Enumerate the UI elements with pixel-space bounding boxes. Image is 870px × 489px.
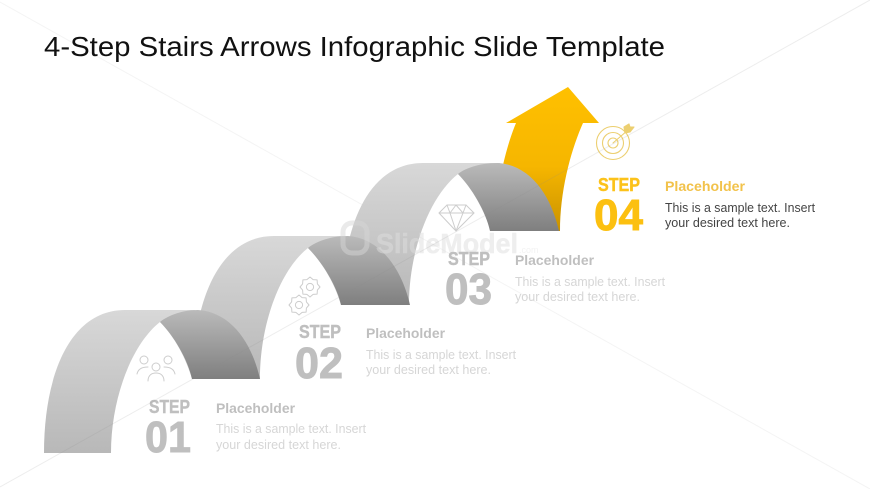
stair arch 1 bbox=[44, 310, 260, 453]
watermark: SlideModel bbox=[376, 228, 518, 259]
step 1 text: STEP bbox=[149, 396, 190, 417]
step 2 text: STEP bbox=[299, 321, 341, 342]
step 2 text bbox=[295, 321, 517, 388]
watermark: .com bbox=[519, 245, 539, 255]
step 4 text: This is a sample text. Insert bbox=[665, 201, 816, 215]
title: 4-Step Stairs Arrows Infographic Slide Template bbox=[44, 31, 665, 62]
step 4 text: 04 bbox=[594, 191, 644, 240]
icon: diamond bbox=[439, 205, 474, 231]
step 3 text: STEP bbox=[448, 248, 490, 269]
step 3 text: This is a sample text. Insert bbox=[515, 275, 666, 289]
step 2 text: your desired text here. bbox=[366, 363, 491, 377]
step 3 text: 03 bbox=[445, 265, 492, 314]
step 2 text: 02 bbox=[295, 339, 343, 388]
step 1 text: your desired text here. bbox=[216, 438, 341, 452]
step 3 text: Placeholder bbox=[515, 252, 595, 268]
icon: gears bbox=[289, 277, 320, 315]
step 3 text bbox=[445, 248, 666, 314]
stair arch 2 bbox=[193, 236, 410, 379]
watermark bbox=[343, 223, 539, 259]
step 4 text: STEP bbox=[598, 174, 640, 195]
step 3 text: your desired text here. bbox=[515, 290, 640, 304]
stair arch 3 bbox=[342, 163, 559, 305]
icon: people bbox=[137, 356, 175, 381]
icon: target bbox=[596, 124, 634, 160]
step 1 text: This is a sample text. Insert bbox=[216, 422, 367, 436]
step 1 text: 01 bbox=[145, 413, 191, 462]
step 2 text: This is a sample text. Insert bbox=[366, 348, 517, 362]
step 1 text bbox=[145, 396, 367, 462]
yellow arrow bbox=[503, 87, 599, 231]
step 4 text bbox=[594, 174, 816, 240]
step 4 text: Placeholder bbox=[665, 178, 746, 194]
step 4 text: your desired text here. bbox=[665, 216, 790, 230]
step 2 text: Placeholder bbox=[366, 325, 446, 341]
step 1 text: Placeholder bbox=[216, 400, 296, 416]
